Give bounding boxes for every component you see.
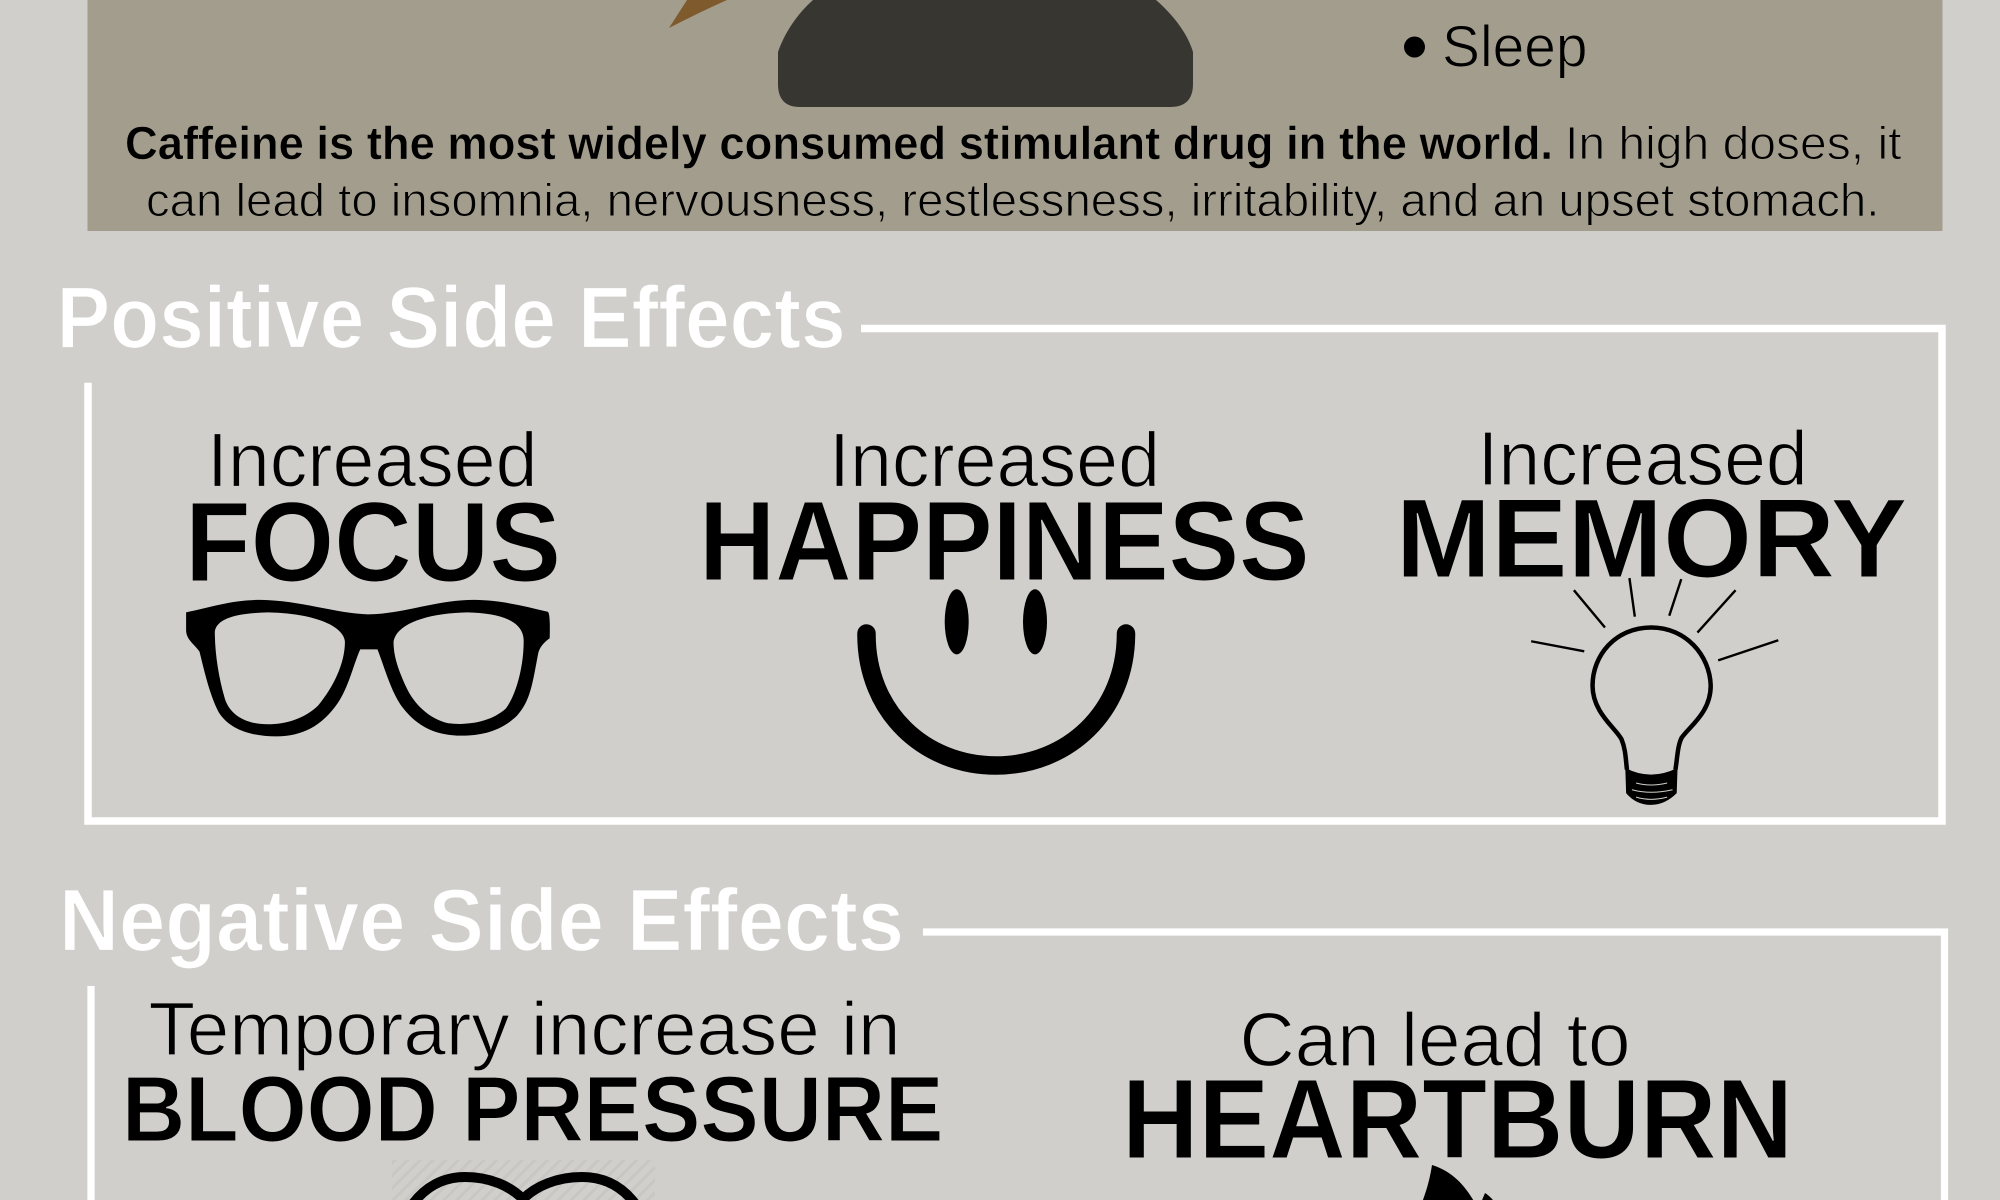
item: heartburn: HEARTBURN: [1122, 1056, 1793, 1182]
heading: negative side effects: Negative Side Effects: [59, 871, 904, 970]
icon: coffee bean sliver: [669, 0, 727, 28]
panel frame: positive side effects: [88, 328, 1942, 821]
item: increased happiness: [699, 418, 1310, 766]
icon: light bulb: [1531, 578, 1778, 805]
text block: caffeine description: In high doses, it: [1565, 117, 1902, 169]
item: increased focus: [185, 418, 561, 736]
panel frame: negative side effects: [91, 932, 1944, 1200]
item: increased memory: MEMORY: [1396, 476, 1907, 601]
item: increased happiness: HAPPINESS: [699, 478, 1310, 604]
bullet item: sleep: Sleep: [1442, 15, 1588, 80]
item: increased happiness: Increased: [829, 418, 1160, 504]
item: increased focus: Increased: [207, 418, 538, 504]
item: blood pressure: BLOOD PRESSURE: [122, 1057, 943, 1161]
text block: caffeine description: [125, 117, 1902, 226]
panel: caffeine intro: [88, 0, 1942, 231]
item: heartburn: [1122, 998, 1793, 1200]
item: increased memory: [1396, 416, 1907, 805]
item: blood pressure: [122, 987, 943, 1200]
text block: caffeine description: can lead to insomnia, nervousness, restlessness, irritability, and an upset stomach.: [146, 174, 1879, 226]
text block: caffeine description: Caffeine is the most widely consumed stimulant drug in the world.: [125, 117, 1553, 169]
heading: positive side effects: Positive Side Effects: [57, 270, 846, 367]
item: increased focus: FOCUS: [185, 479, 561, 605]
item: increased memory: Increased: [1478, 416, 1808, 502]
icon: dark cup base: [778, 0, 1193, 107]
icon: flame: [1421, 1165, 1497, 1200]
icon: glasses: [186, 600, 550, 736]
icon: heart with hatch background: [392, 1160, 655, 1200]
item: blood pressure: Temporary increase in: [148, 987, 900, 1072]
icon: smiley face: [866, 589, 1126, 766]
item: heartburn: Can lead to: [1240, 998, 1630, 1083]
